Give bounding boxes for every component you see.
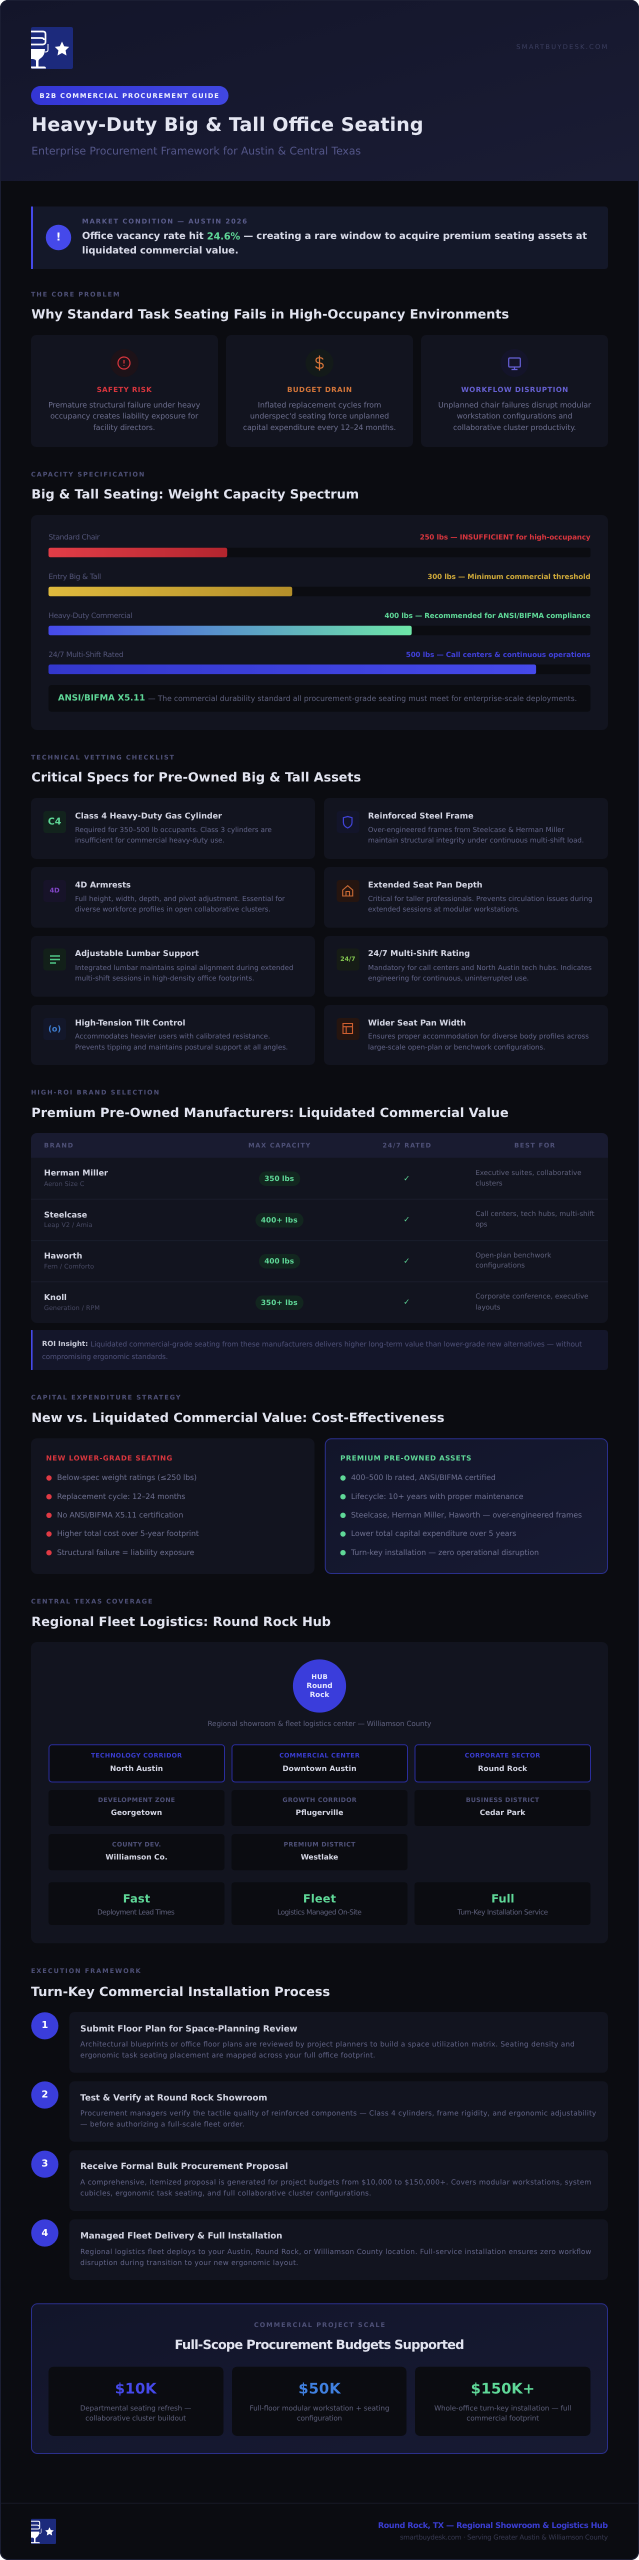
icon: layout (337, 1018, 359, 1040)
section heading: capacity: Big & Tall Seating: Weight Capacity Spectrum (31, 486, 359, 502)
bar: 24/7 multi-shift rated (48, 650, 590, 674)
panel: safety risk: occupancy creates liability exposure for (50, 412, 199, 420)
panel: budget drain (226, 335, 413, 447)
row: Knoll: 350+ lbs (261, 1298, 298, 1307)
card: 4D armrests (31, 867, 315, 928)
table: manufacturers (31, 1133, 608, 1323)
callout: ANSI/BIFMA: ANSI/BIFMA X5.11 (58, 694, 145, 704)
budget: $50K: $50K (298, 2382, 341, 2398)
table header: BRAND (44, 1142, 73, 1150)
card: lumbar support: multi-shift sessions in high-density office footprints. (75, 974, 254, 982)
step 4: disruption during transition to your new ergonomic layout. (80, 2258, 298, 2267)
node: Westlake: Westlake (301, 1852, 338, 1862)
budget: $10K: $10K (115, 2382, 157, 2398)
node: Pflugerville: GROWTH CORRIDOR (282, 1797, 357, 1804)
panel: new lower-grade seating: Replacement cycle: 12–24 months (57, 1492, 185, 1501)
icon: 24/7: 24/7 (340, 956, 355, 963)
budget: $10K (48, 2367, 224, 2436)
row: Steelcase: Steelcase (44, 1210, 88, 1220)
card: seat pan width (324, 1005, 608, 1065)
node: Westlake (232, 1834, 408, 1870)
section heading: capacity: CAPACITY SPECIFICATION (31, 472, 144, 478)
stat: fast: Deployment Lead Times (97, 1909, 175, 1917)
card: steel frame (324, 798, 608, 859)
node: Downtown Austin (232, 1745, 408, 1782)
step 2: Procurement managers verify the tactile quality of reinforced components — Class 4 cylinders, frame rigidity, and ergonomic adjustability (80, 2108, 596, 2118)
icon: home (337, 880, 359, 902)
card: steel frame: Reinforced Steel Frame (368, 812, 474, 820)
bar: heavy-duty commercial (48, 611, 591, 635)
row: Haworth: Haworth (44, 1252, 83, 1260)
budget: $10K: collaborative cluster buildout (85, 2414, 186, 2422)
badge: B2B guide: B2B COMMERCIAL PROCUREMENT GUIDE (40, 92, 219, 100)
row: Steelcase (44, 1210, 595, 1229)
footer: smartbuydesk.com · Serving Greater Austin & Williamson County (400, 2534, 608, 2542)
icon: tilt: (o) (48, 1024, 61, 1034)
step 2: — before authorizing a full-scale fleet order. (80, 2120, 244, 2128)
footer (0, 2503, 639, 2544)
section heading: capital expenditure: CAPITAL EXPENDITURE STRATEGY (31, 1394, 181, 1402)
stat: fast: Fast (123, 1892, 151, 1906)
step 1: ergonomic task seating placement are mapped across your full office footprint. (80, 2050, 375, 2060)
budget: $150K+ (415, 2367, 590, 2436)
node: Williamson Co.: Williamson Co. (106, 1852, 168, 1862)
icon: monitor (500, 349, 528, 377)
card: gas cylinder (31, 798, 315, 859)
row: Knoll (44, 1293, 588, 1312)
bar: entry big and tall: 300 lbs — Minimum commercial threshold (428, 572, 590, 581)
row: Herman Miller: Executive suites, collaborative (476, 1169, 582, 1177)
section heading: coverage: Regional Fleet Logistics: Round Rock Hub (31, 1614, 331, 1629)
icon: C4: C4 (48, 816, 62, 828)
site name: SMARTBUYDESK.COM (516, 43, 608, 51)
node: Downtown Austin: COMMERCIAL CENTER (279, 1752, 360, 1760)
panel: premium pre-owned assets: Steelcase, Herman Miller, Haworth — over-engineered frames (351, 1510, 582, 1520)
bar: 24/7 multi-shift rated: 500 lbs — Call centers & continuous operations (406, 650, 590, 659)
hub circle (293, 1659, 346, 1713)
row: Knoll: ✓ (403, 1298, 410, 1306)
callout: ROI insight (31, 1330, 608, 1370)
panel: premium pre-owned assets: Lifecycle: 10+ years with proper maintenance (351, 1492, 524, 1501)
alert: market condition: Office vacancy rate hit 24.6% — creating a rare window to acquire premium seating assets at (82, 231, 587, 242)
section heading: core problem: THE CORE PROBLEM (31, 292, 119, 298)
row: Herman Miller (44, 1168, 582, 1188)
node: Georgetown: Georgetown (111, 1808, 162, 1817)
section heading: core problem (31, 292, 509, 322)
callout: ROI insight: compromising ergonomic standards. (42, 1352, 168, 1361)
row: Steelcase: 400+ lbs (261, 1216, 298, 1224)
stat: full: Turn-Key Installation Service (457, 1909, 548, 1917)
callout: ROI insight: Liquidated commercial-grade seating from these manufacturers delivers higher long-term value than lower-grade new alternatives — without (90, 1340, 582, 1348)
card: tilt control: Prevents tipping and maintains postural support at all angles. (75, 1044, 288, 1052)
budget: $50K: configuration (297, 2414, 342, 2422)
alert: market condition: MARKET CONDITION — AUSTIN 2026 (82, 218, 247, 226)
step 4: Managed Fleet Delivery & Full Installation (80, 2232, 282, 2242)
card: gas cylinder: insufficient for commercial heavy-duty use. (75, 836, 225, 844)
table header (44, 1142, 555, 1150)
step 3 (31, 2150, 608, 2211)
panel: workflow disruption (421, 335, 608, 447)
icon: alert (46, 225, 71, 250)
footer logo (30, 2519, 56, 2544)
card: tilt control (31, 1005, 315, 1065)
stat: fleet (232, 1882, 408, 1925)
section heading: core problem: Why Standard Task Seating Fails in High-Occupancy Environments (31, 306, 509, 322)
node: Westlake: PREMIUM DISTRICT (284, 1842, 356, 1848)
panel: new lower-grade seating: Higher total cost over 5-year footprint (57, 1529, 199, 1538)
stat: fleet: Fleet (303, 1892, 337, 1906)
panel: new lower-grade seating: NEW LOWER-GRADE SEATING (46, 1454, 173, 1462)
section heading: brand selection (31, 1090, 509, 1120)
budget: $50K: Full-floor modular workstation + seating (250, 2405, 389, 2413)
row: Haworth: Open-plan benchwork (476, 1252, 551, 1260)
card: steel frame: maintain structural integrity under continuous multi-shift load. (368, 836, 584, 844)
hub circle: Rock (310, 1690, 330, 1699)
row: Steelcase: Call centers, tech hubs, multi-shift (476, 1210, 595, 1218)
row: Steelcase: Leap V2 / Amia (44, 1222, 93, 1229)
subtitle: Enterprise Procurement Framework for Austin & Central Texas (31, 144, 361, 158)
budget: $10K: Departmental seating refresh — (80, 2405, 191, 2413)
budget: $150K+: Whole-office turn-key installation — full (434, 2405, 571, 2413)
icon: shield (337, 811, 359, 833)
badge: B2B guide (31, 86, 228, 105)
node: Georgetown (48, 1790, 224, 1826)
step 4: 4 (41, 2228, 48, 2239)
section heading: execution framework: Turn-Key Commercial Installation Process (31, 1984, 330, 1999)
panel: procurement budgets (32, 2304, 608, 2454)
icon: lumbar bars (43, 948, 66, 970)
row: Steelcase: ✓ (403, 1215, 410, 1224)
section heading: brand selection: Premium Pre-Owned Manufacturers: Liquidated Commercial Value (31, 1105, 509, 1120)
node: Round Rock: Round Rock (478, 1764, 528, 1773)
step 3: Receive Formal Bulk Procurement Proposal (80, 2162, 288, 2172)
panel: new lower-grade seating: No ANSI/BIFMA X5.11 certification (57, 1510, 183, 1520)
card: multi-shift rating: 24/7 Multi-Shift Rating (368, 949, 470, 958)
alert: market condition (31, 206, 608, 269)
node: Williamson Co.: COUNTY DEV. (112, 1842, 161, 1848)
card: gas cylinder: Required for 350–500 lb occupants. Class 3 cylinders are (75, 826, 272, 834)
bar: standard chair: 250 lbs — INSUFFICIENT for high-occupancy (420, 532, 591, 542)
panel: workflow disruption: WORKFLOW DISRUPTION (461, 386, 568, 394)
node: Cedar Park: BUSINESS DISTRICT (466, 1797, 540, 1804)
icon: 4D: 4D (50, 887, 60, 895)
card: lumbar support: Integrated lumbar maintains spinal alignment during extended (75, 964, 293, 972)
card: seat pan depth (324, 867, 608, 928)
node: North Austin: North Austin (110, 1764, 163, 1773)
row: Haworth: configurations (476, 1262, 525, 1270)
panel: new lower-grade seating: Below-spec weight ratings (≤250 lbs) (57, 1473, 197, 1482)
section heading: execution framework (31, 1968, 330, 1999)
row: Herman Miller: Aeron Size C (44, 1181, 85, 1188)
node: Georgetown: DEVELOPMENT ZONE (98, 1797, 175, 1804)
panel: safety risk (31, 335, 218, 447)
icon: 4D (43, 880, 66, 902)
card: multi-shift rating: engineering for continuous, uninterrupted use. (368, 974, 529, 982)
hub caption: Regional showroom & fleet logistics center — Williamson County (208, 1719, 431, 1728)
panel: workflow disruption: collaborative cluster productivity. (453, 423, 576, 432)
panel: new lower-grade seating (31, 1438, 314, 1574)
card: 4D armrests: Full height, width, depth, and pivot adjustment. Essential for (75, 895, 285, 903)
card: lumbar support (31, 936, 315, 997)
step 1: Submit Floor Plan for Space-Planning Review (80, 2024, 298, 2034)
card: seat pan depth: extended sessions at modular workstations. (368, 906, 520, 914)
section heading: coverage (31, 1598, 331, 1629)
icon: tilt (43, 1018, 66, 1040)
section heading: coverage: CENTRAL TEXAS COVERAGE (31, 1598, 152, 1606)
panel: budget drain: capital expenditure every 12–24 months. (243, 423, 396, 432)
card: 4D armrests: 4D Armrests (75, 880, 131, 890)
section heading: technical vetting (31, 754, 361, 784)
row: Knoll: layouts (476, 1303, 501, 1311)
row: Herman Miller: ✓ (403, 1174, 410, 1183)
step 4 (31, 2219, 608, 2280)
node: Cedar Park (414, 1790, 590, 1826)
panel: budget drain: BUDGET DRAIN (287, 386, 352, 394)
card: seat pan width: Ensures proper accommodation for diverse body profiles across (368, 1033, 589, 1041)
stat: fast (48, 1882, 224, 1925)
card: tilt control: Accommodates heavier users with calibrated resistance. (75, 1033, 270, 1041)
row: Herman Miller: clusters (476, 1179, 503, 1187)
panel: regional logistics (31, 1642, 608, 1943)
card: lumbar support: Adjustable Lumbar Support (75, 949, 199, 958)
icon: alert: ! (56, 230, 61, 244)
icon: warning circle (110, 349, 138, 377)
card: gas cylinder: Class 4 Heavy-Duty Gas Cylinder (75, 812, 222, 820)
card: seat pan width: Wider Seat Pan Width (368, 1018, 466, 1028)
card: tilt control: High-Tension Tilt Control (75, 1018, 186, 1028)
budget: $150K+: commercial footprint (467, 2414, 539, 2422)
panel: premium pre-owned assets: Lower total capital expenditure over 5 years (351, 1529, 516, 1538)
card: 4D armrests: diverse workforce profiles in open collaborative clusters. (75, 906, 271, 914)
panel: procurement budgets: Full-Scope Procurement Budgets Supported (175, 2337, 464, 2352)
panel: budget drain: underspec'd seating force unplanned (250, 412, 389, 420)
callout: ANSI/BIFMA: — The commercial durability standard all procurement-grade seating must meet for enterprise-scale deployments. (148, 694, 577, 703)
node: Pflugerville: Pflugerville (296, 1808, 343, 1817)
row: Knoll: Generation / RPM (44, 1305, 100, 1312)
icon: 24/7 (337, 948, 359, 970)
step 3: 3 (41, 2158, 48, 2170)
step 2: Test & Verify at Round Rock Showroom (80, 2093, 267, 2103)
bar: entry big and tall (48, 572, 590, 596)
bar: standard chair (48, 532, 591, 557)
row: Knoll: Knoll (44, 1293, 67, 1302)
hub circle: HUB (311, 1673, 328, 1681)
panel: procurement budgets: COMMERCIAL PROJECT SCALE (254, 2322, 385, 2329)
row: Knoll: Corporate conference, executive (476, 1293, 588, 1301)
hub circle: Round (306, 1681, 332, 1690)
footer: Round Rock, TX — Regional Showroom & Logistics Hub (378, 2521, 608, 2530)
alert: market condition: liquidated commercial value. (82, 246, 238, 256)
panel: workflow disruption: workstation configurations and (457, 412, 573, 420)
table header: 24/7 RATED (382, 1142, 431, 1150)
bar: heavy-duty commercial: 400 lbs — Recommended for ANSI/BIFMA compliance (384, 611, 591, 620)
panel: premium pre-owned assets: Turn-key installation — zero operational disruption (350, 1548, 539, 1557)
row: Haworth: ✓ (403, 1256, 410, 1266)
row: Herman Miller: 350 lbs (264, 1174, 294, 1183)
node: North Austin: TECHNOLOGY CORRIDOR (91, 1752, 182, 1760)
card: seat pan depth: Extended Seat Pan Depth (368, 880, 483, 890)
budget: $50K (232, 2367, 406, 2436)
node: Williamson Co. (48, 1834, 224, 1870)
stat: fleet: Logistics Managed On-Site (277, 1909, 362, 1917)
panel: premium pre-owned assets: PREMIUM PRE-OWNED ASSETS (340, 1454, 471, 1462)
node: Downtown Austin: Downtown Austin (282, 1764, 356, 1773)
section heading: brand selection: HIGH-ROI BRAND SELECTION (31, 1090, 159, 1096)
callout: ROI insight: ROI Insight: (42, 1340, 88, 1348)
section heading: capital expenditure: New vs. Liquidated Commercial Value: Cost-Effectiveness (31, 1410, 444, 1425)
bar: 24/7 multi-shift rated: 24/7 Multi-Shift Rated (48, 650, 124, 659)
logo: chair and star (29, 27, 73, 69)
card: steel frame: Over-engineered frames from Steelcase & Herman Miller (368, 826, 565, 834)
step 2: 2 (41, 2090, 48, 2100)
section heading: capacity (31, 472, 359, 502)
panel: new lower-grade seating: Structural failure = liability exposure (57, 1548, 195, 1557)
step 3: cubicles, ergonomic task seating, and full collaborative cluster configurations. (80, 2188, 371, 2198)
panel: safety risk: facility directors. (93, 423, 155, 432)
bar: standard chair: Standard Chair (48, 532, 100, 542)
node: North Austin (49, 1745, 224, 1782)
node: Round Rock (415, 1745, 590, 1782)
panel: budget drain: Inflated replacement cycles from (258, 400, 381, 410)
step 4: Regional logistics fleet deploys to your Austin, Round Rock, or Williamson County location. Full-service installation ensures zero workflow (80, 2247, 592, 2256)
card: multi-shift rating (324, 936, 608, 997)
node: Pflugerville (232, 1790, 408, 1826)
panel: weight capacity spectrum (31, 515, 608, 730)
step 1 (31, 2012, 608, 2073)
icon: C4 (43, 811, 66, 833)
bar: entry big and tall: Entry Big & Tall (48, 572, 101, 581)
row: Haworth: 400 lbs (264, 1256, 294, 1266)
section heading: technical vetting: Critical Specs for Pre-Owned Big & Tall Assets (31, 770, 361, 784)
table header: BEST FOR (514, 1142, 555, 1150)
title: Heavy-Duty Big & Tall Office Seating (31, 114, 423, 136)
stat: full (414, 1882, 590, 1925)
panel: safety risk: SAFETY RISK (97, 386, 152, 394)
stat: full: Full (491, 1892, 514, 1906)
step 2 (31, 2081, 608, 2142)
icon: dollar (315, 356, 324, 370)
table header: MAX CAPACITY (248, 1142, 311, 1150)
node: Cedar Park: Cedar Park (480, 1808, 526, 1817)
row: Herman Miller: Herman Miller (44, 1168, 108, 1178)
section heading: execution framework: EXECUTION FRAMEWORK (31, 1968, 142, 1975)
section heading: technical vetting: TECHNICAL VETTING CHECKLIST (31, 754, 175, 762)
bar: heavy-duty commercial: Heavy-Duty Commercial (48, 611, 132, 620)
step 3: A comprehensive, itemized proposal is generated for project budgets from $10,000 to $150,000+. Covers modular workstations, system (80, 2178, 591, 2186)
header banner (0, 0, 639, 181)
card: multi-shift rating: Mandatory for call centers and North Austin tech hubs. Indicates (368, 964, 592, 972)
panel: safety risk: Premature structural failure under heavy (48, 400, 201, 410)
panel: workflow disruption: Unplanned chair failures disrupt modular (438, 400, 592, 410)
budget: $150K+: $150K+ (471, 2382, 535, 2398)
callout: ANSI/BIFMA (48, 685, 590, 712)
card: seat pan depth: Critical for taller professionals. Prevents circulation issues during (368, 895, 592, 903)
panel: premium pre-owned assets: 400–500 lb rated, ANSI/BIFMA certified (351, 1473, 496, 1482)
node: Round Rock: CORPORATE SECTOR (465, 1752, 540, 1760)
step 1: Architectural blueprints or office floor plans are reviewed by project planners to build a space utilization matrix. Seating density and (80, 2040, 575, 2048)
panel: premium pre-owned assets (325, 1439, 608, 1574)
section heading: capital expenditure (31, 1394, 444, 1425)
step 1: 1 (41, 2020, 48, 2031)
card: seat pan width: large-scale open-plan or benchwork configurations. (368, 1044, 545, 1052)
row: Steelcase: ops (476, 1221, 488, 1229)
row: Haworth: Fern / Comforto (44, 1264, 94, 1270)
row: Haworth (44, 1252, 551, 1270)
